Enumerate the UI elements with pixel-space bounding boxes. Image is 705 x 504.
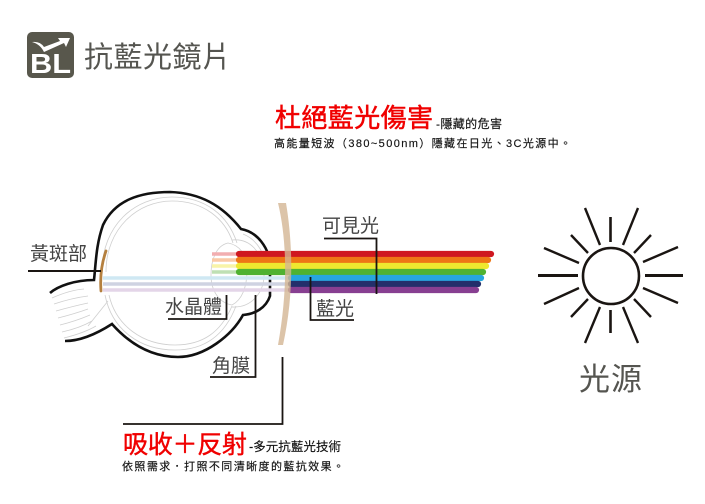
rainbow beam	[239, 254, 491, 290]
label: visible light	[322, 215, 379, 294]
logo: BL icon	[27, 32, 74, 79]
label: macula	[28, 243, 101, 271]
text: high energy short wave: 高能量短波（380~500nm）隱藏在日光、3C光源中。	[274, 136, 571, 150]
page title: 抗藍光鏡片	[84, 41, 231, 74]
heading: block blue light: -隱藏的危害	[436, 116, 502, 131]
eye inner lines	[52, 197, 266, 350]
label: cornea: 角膜	[212, 355, 250, 377]
label: crystalline lens: 水晶體	[165, 296, 222, 318]
eye diagram	[50, 192, 270, 357]
icon: sun	[538, 208, 683, 343]
label: light source: 光源	[579, 362, 642, 397]
label: blue light	[310, 277, 354, 320]
heading: absorb and reflect: 吸收＋反射	[123, 431, 247, 459]
refracted pale light rays	[103, 254, 292, 290]
label: visible light: 可見光	[322, 215, 379, 237]
heading: absorb and reflect: -多元抗藍光技術	[249, 439, 341, 454]
label: macula: 黃斑部	[30, 243, 87, 265]
heading: absorb and reflect	[123, 431, 341, 459]
eye outline	[50, 192, 270, 357]
heading: block blue light: 杜絕藍光傷害	[275, 103, 433, 133]
lens cross-section	[278, 203, 291, 345]
label: cornea	[210, 295, 256, 377]
label: blue light: 藍光	[316, 298, 354, 320]
heading: block blue light	[275, 103, 502, 133]
text: according to needs: 依照需求．打照不同清晰度的藍抗效果。	[122, 459, 344, 473]
macula	[101, 251, 106, 291]
logo: BL icon: BL	[30, 48, 71, 79]
pointer line from lens to caption	[123, 357, 282, 424]
